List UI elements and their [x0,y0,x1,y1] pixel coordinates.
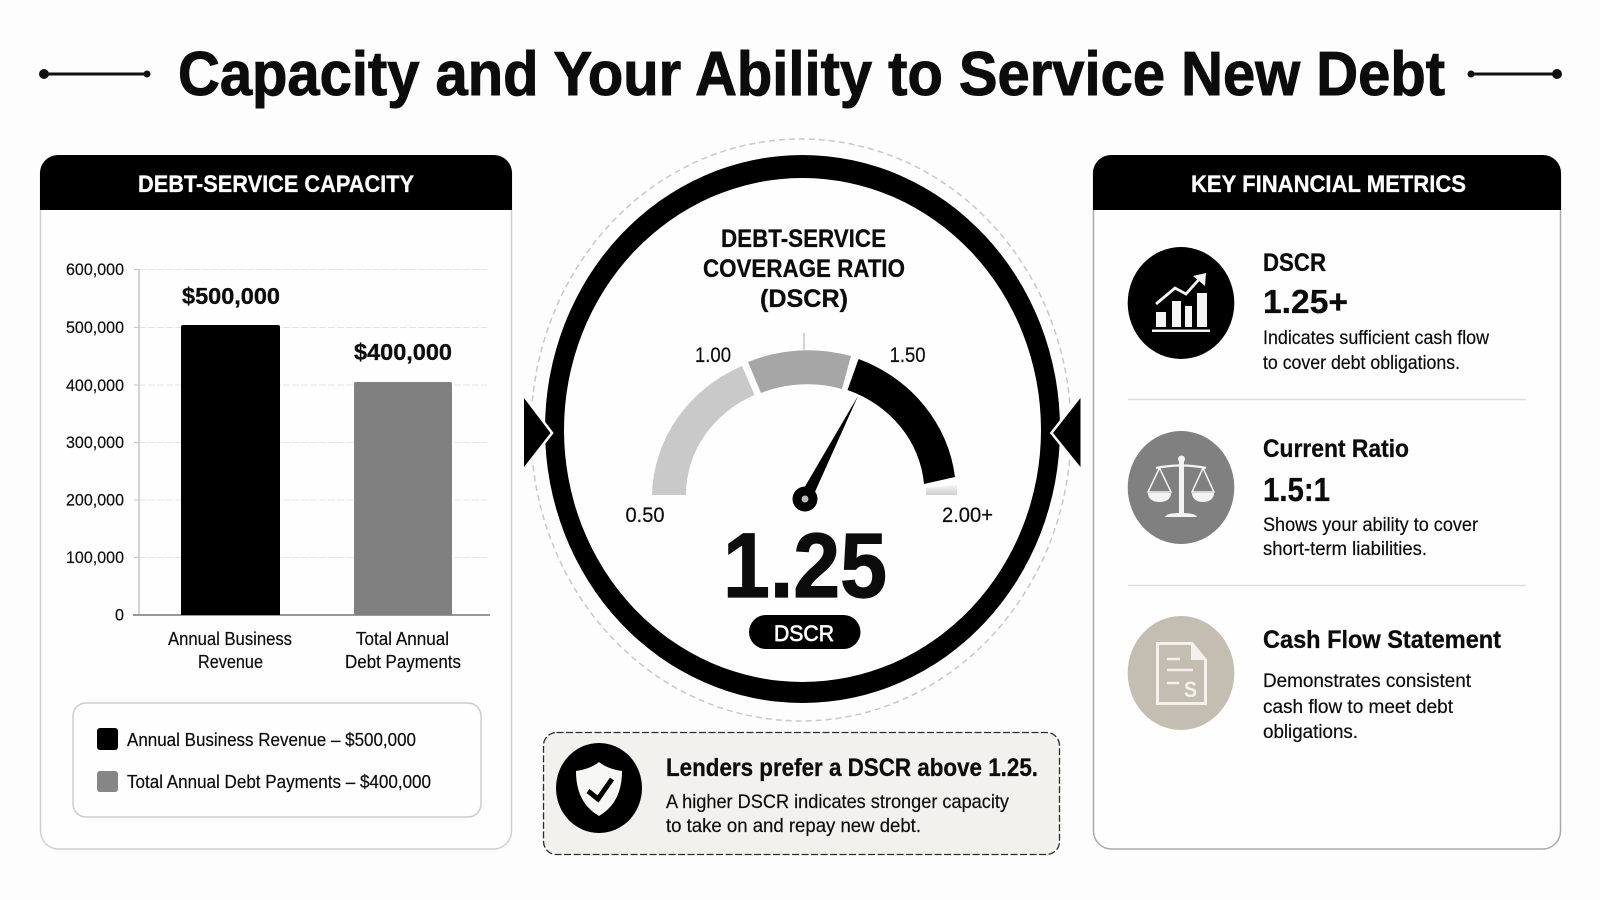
callout: lenders prefer: A higher DSCR indicates stronger capacity [666,791,1009,813]
bar: total annual debt payments: $400,000 [354,339,452,365]
bar: total annual debt payments [345,339,461,672]
bar chart: 300,000 [66,433,124,452]
metric: current ratio: Shows your ability to cover [1263,515,1479,536]
legend [73,703,481,817]
dscr value: 1.25 [723,515,887,617]
metric: current ratio: 1.5:1 [1263,471,1330,508]
gauge [626,333,993,527]
panel header: debt-service capacity: DEBT-SERVICE CAPACITY [138,171,414,198]
metric: dscr: DSCR [1263,249,1326,277]
title: Capacity and Your Ability to Service New Debt [178,40,1445,109]
metric: cash flow statement: Demonstrates consistent [1263,671,1472,692]
gauge needle [792,396,858,512]
panel header: key financial metrics [1093,155,1561,210]
metric: dscr: 1.25+ [1263,283,1348,320]
panel header: key financial metrics: KEY FINANCIAL METRICS [1191,171,1466,198]
panel: debt-service capacity [40,155,512,849]
metric: current ratio: Current Ratio [1263,435,1409,463]
bar chart: 200,000 [66,490,124,510]
bar chart [66,260,490,672]
metric: cash flow statement: cash flow to meet debt [1263,697,1454,718]
arrow: left pointer [524,398,550,467]
bar chart: 100,000 [66,548,124,567]
panel: key financial metrics [1093,155,1561,849]
panel header: debt-service capacity [40,155,512,210]
metric: cash flow statement [1128,616,1502,743]
bar: annual business revenue: $500,000 [182,283,280,309]
bar chart: 400,000 [66,376,124,395]
gauge: 2.00+ [942,504,993,527]
bar chart: 0 [115,606,124,624]
gauge: 0.50 [626,504,664,527]
bar chart: 500,000 [66,318,124,337]
dscr dial: ring and gauge [524,155,1080,703]
bar: annual business revenue [168,283,292,672]
dashed outer ring [531,139,1071,721]
metric: dscr: Indicates sufficient cash flow [1263,328,1489,349]
icon: balance scale [1128,431,1234,544]
metric: current ratio: short-term liabilities. [1263,539,1427,560]
gauge: 1.00 [695,344,731,367]
bar: annual business revenue: Revenue [198,652,263,672]
metric: cash flow statement: obligations. [1263,722,1358,743]
callout: lenders prefer [544,732,1060,854]
icon: document: S [1184,677,1197,702]
metric: dscr [1128,247,1489,374]
dscr pill: DSCR [774,621,834,646]
bar: annual business revenue: Annual Business [168,629,292,649]
gauge heading: (DSCR) [760,285,848,313]
dscr pill [749,615,860,649]
callout: lenders prefer: Lenders prefer a DSCR above 1.25. [666,754,1038,782]
gauge heading: DEBT-SERVICE [721,225,886,253]
bar chart: 600,000 [66,260,124,279]
legend: Total Annual Debt Payments – $400,000 [127,772,431,792]
gauge: 1.50 [890,344,926,367]
gauge heading: COVERAGE RATIO [703,255,905,283]
gauge heading [703,225,905,313]
bar: total annual debt payments: Total Annual [356,629,449,649]
icon: shield check [556,743,642,833]
icon: growth chart [1128,247,1234,359]
metric: cash flow statement: Cash Flow Statement [1263,626,1502,654]
callout: lenders prefer: to take on and repay new debt. [666,815,921,837]
icon: document [1128,616,1234,730]
metric: current ratio [1128,431,1479,560]
bar: total annual debt payments: Debt Payments [345,652,461,672]
metric: dscr: to cover debt obligations. [1263,353,1460,374]
legend: Annual Business Revenue – $500,000 [127,730,416,750]
arrow: right pointer [1053,398,1080,467]
